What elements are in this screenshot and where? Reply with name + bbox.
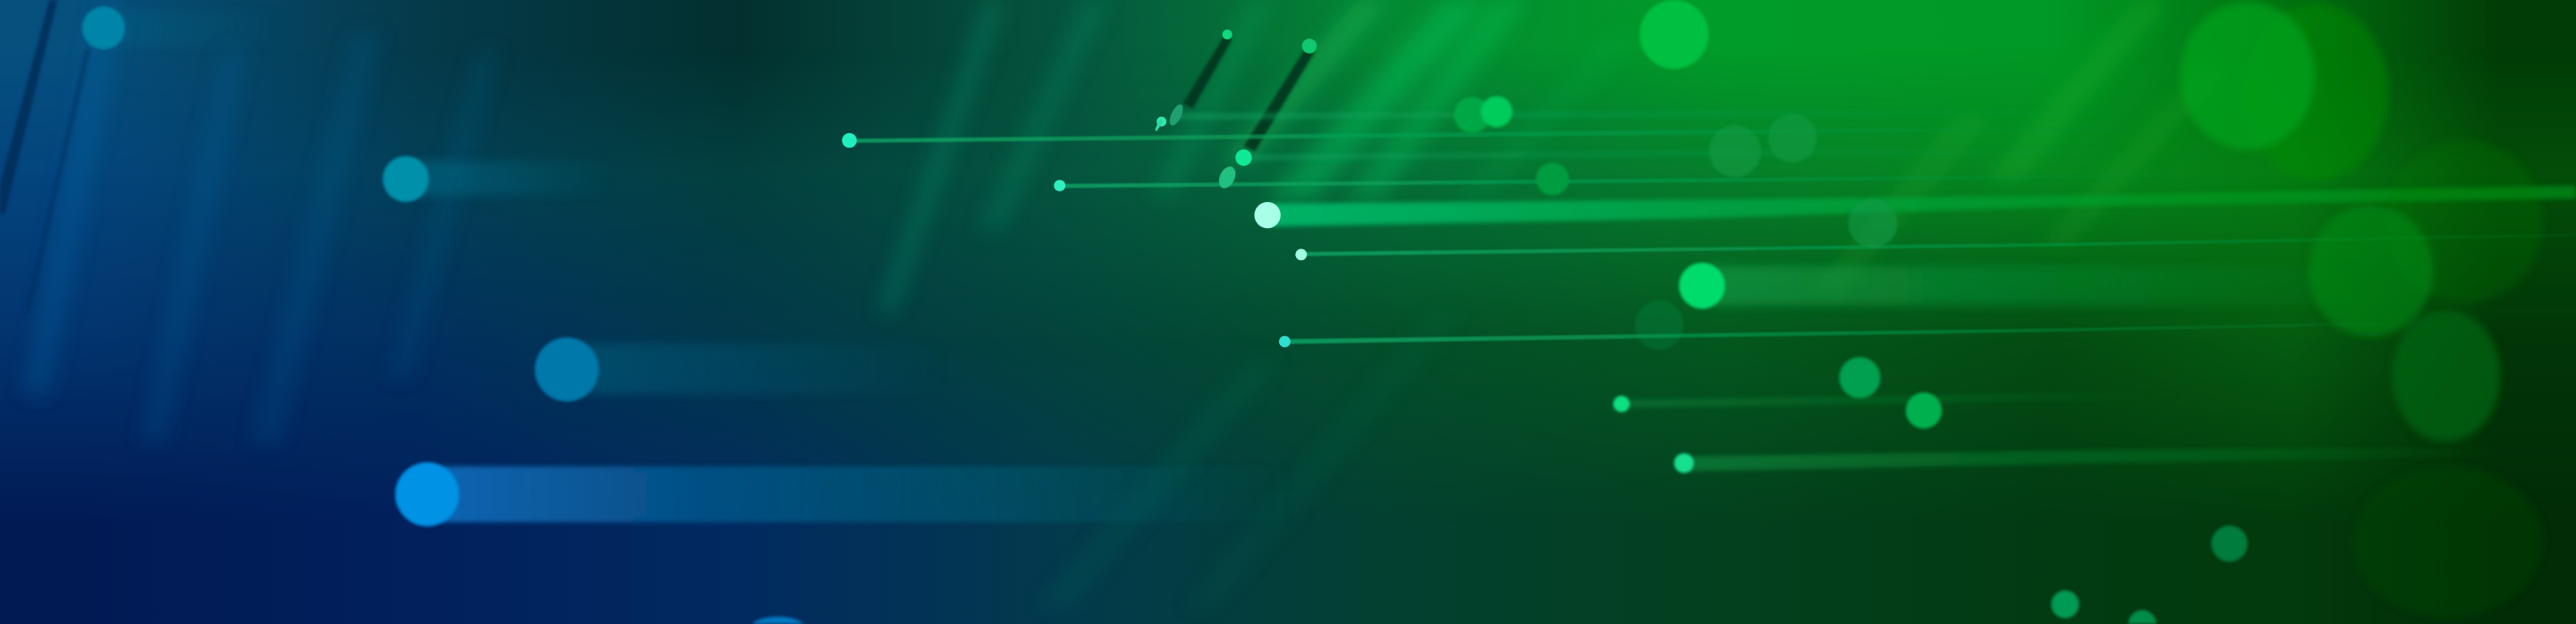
trail: large blue — [440, 467, 1294, 522]
trail: thin second — [1060, 174, 2168, 188]
trail: thin fourth — [1284, 322, 2382, 344]
trail: thin from left tip — [850, 126, 2136, 143]
trail: thin third — [1301, 233, 2576, 257]
trail: faint green — [1622, 391, 2185, 408]
trail: top-left blue — [106, 10, 287, 46]
trail: sky blue upper — [414, 161, 611, 196]
trail: lower green — [1684, 447, 2513, 471]
dark fibre strands — [0, 0, 1314, 312]
light trails — [106, 10, 2576, 522]
bright fibre tips — [842, 30, 1317, 347]
trail: upper short — [1176, 108, 2136, 120]
trail: wide green — [1708, 266, 2366, 306]
blue dots — [82, 6, 803, 624]
large bokeh orbs — [2180, 2, 2543, 618]
trail: mid short — [1249, 148, 2136, 161]
green dots — [1454, 0, 2248, 624]
trail: bright green bar — [1268, 186, 2576, 226]
trail: mid blue — [575, 343, 953, 394]
